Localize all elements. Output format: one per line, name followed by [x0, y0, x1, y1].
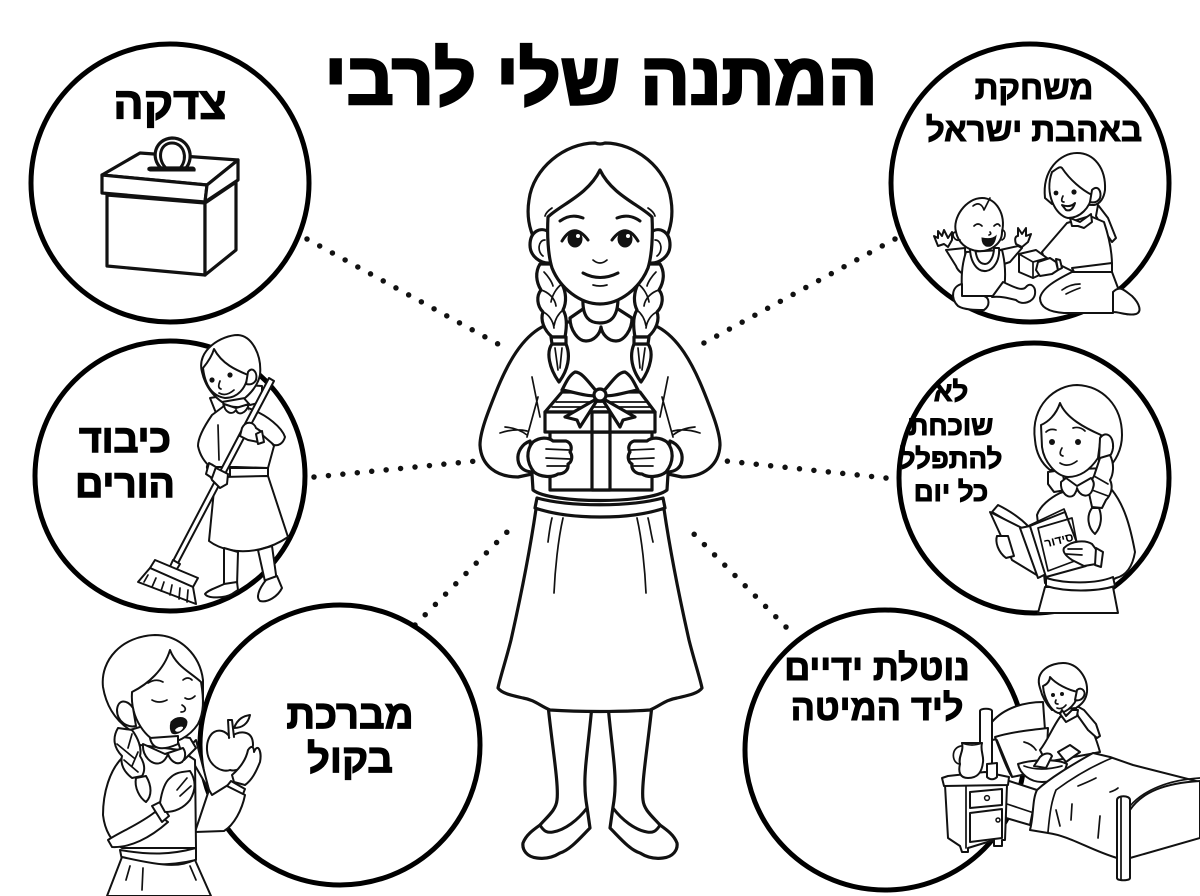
girl: face [548, 170, 652, 304]
girl: waistband [535, 498, 665, 517]
girl: skirt folds [548, 518, 653, 593]
panel: washing hands by the bed [745, 610, 1200, 890]
heading: remembering to pray: כל יום [914, 476, 988, 507]
title: המתנה שלי לרבי [325, 37, 877, 120]
heading: charity: צדקה [113, 78, 227, 129]
dotted connectors [307, 239, 895, 627]
girl: braids [537, 264, 663, 382]
central girl holding gift [480, 143, 720, 858]
girl: facial features [545, 208, 655, 286]
heading: remembering to pray: להתפלל [900, 443, 1002, 474]
girl: hands and cuffs [518, 438, 682, 476]
panel: honoring parents [35, 335, 305, 611]
panel: blessing aloud [103, 605, 480, 896]
figure: girl reading siddur [990, 385, 1135, 613]
icon: charity box with coin [102, 138, 238, 275]
girl: sleeve wrinkles [500, 377, 700, 437]
girl: ears [530, 230, 670, 263]
heading: remembering to pray: שוכחת [909, 410, 993, 441]
girl: sweater [480, 322, 720, 500]
panel: playing with ahavat yisrael [891, 44, 1169, 322]
figure: girl playing with baby [934, 153, 1139, 315]
heading: honoring parents: הורים [75, 463, 175, 506]
heading: washing hands by the bed: נוטלת ידיים [784, 647, 970, 688]
figure: girl washing by bedside [942, 663, 1200, 880]
figure: girl reading siddur: סידור [1043, 530, 1075, 550]
heading: washing hands by the bed: ליד המיטה [791, 687, 963, 728]
figure: girl sweeping [138, 335, 288, 604]
girl: skirt [498, 509, 702, 712]
heading: remembering to pray: לא [934, 376, 968, 407]
heading: playing with ahavat yisrael: באהבת ישראל [926, 111, 1142, 148]
heading: blessing aloud: מברכת [286, 693, 414, 737]
heading: playing with ahavat yisrael: משחקת [975, 69, 1093, 106]
girl: legs and shoes [523, 705, 677, 858]
girl: hair [528, 143, 672, 262]
girl: gift box [545, 372, 655, 490]
girl: collar and neck [570, 298, 632, 341]
heading: honoring parents: כיבוד [79, 418, 171, 461]
figure: girl blessing over an apple [103, 635, 261, 896]
panel: charity [31, 44, 309, 322]
heading: blessing aloud: בקול [307, 737, 393, 781]
panel: remembering to pray [899, 343, 1169, 613]
